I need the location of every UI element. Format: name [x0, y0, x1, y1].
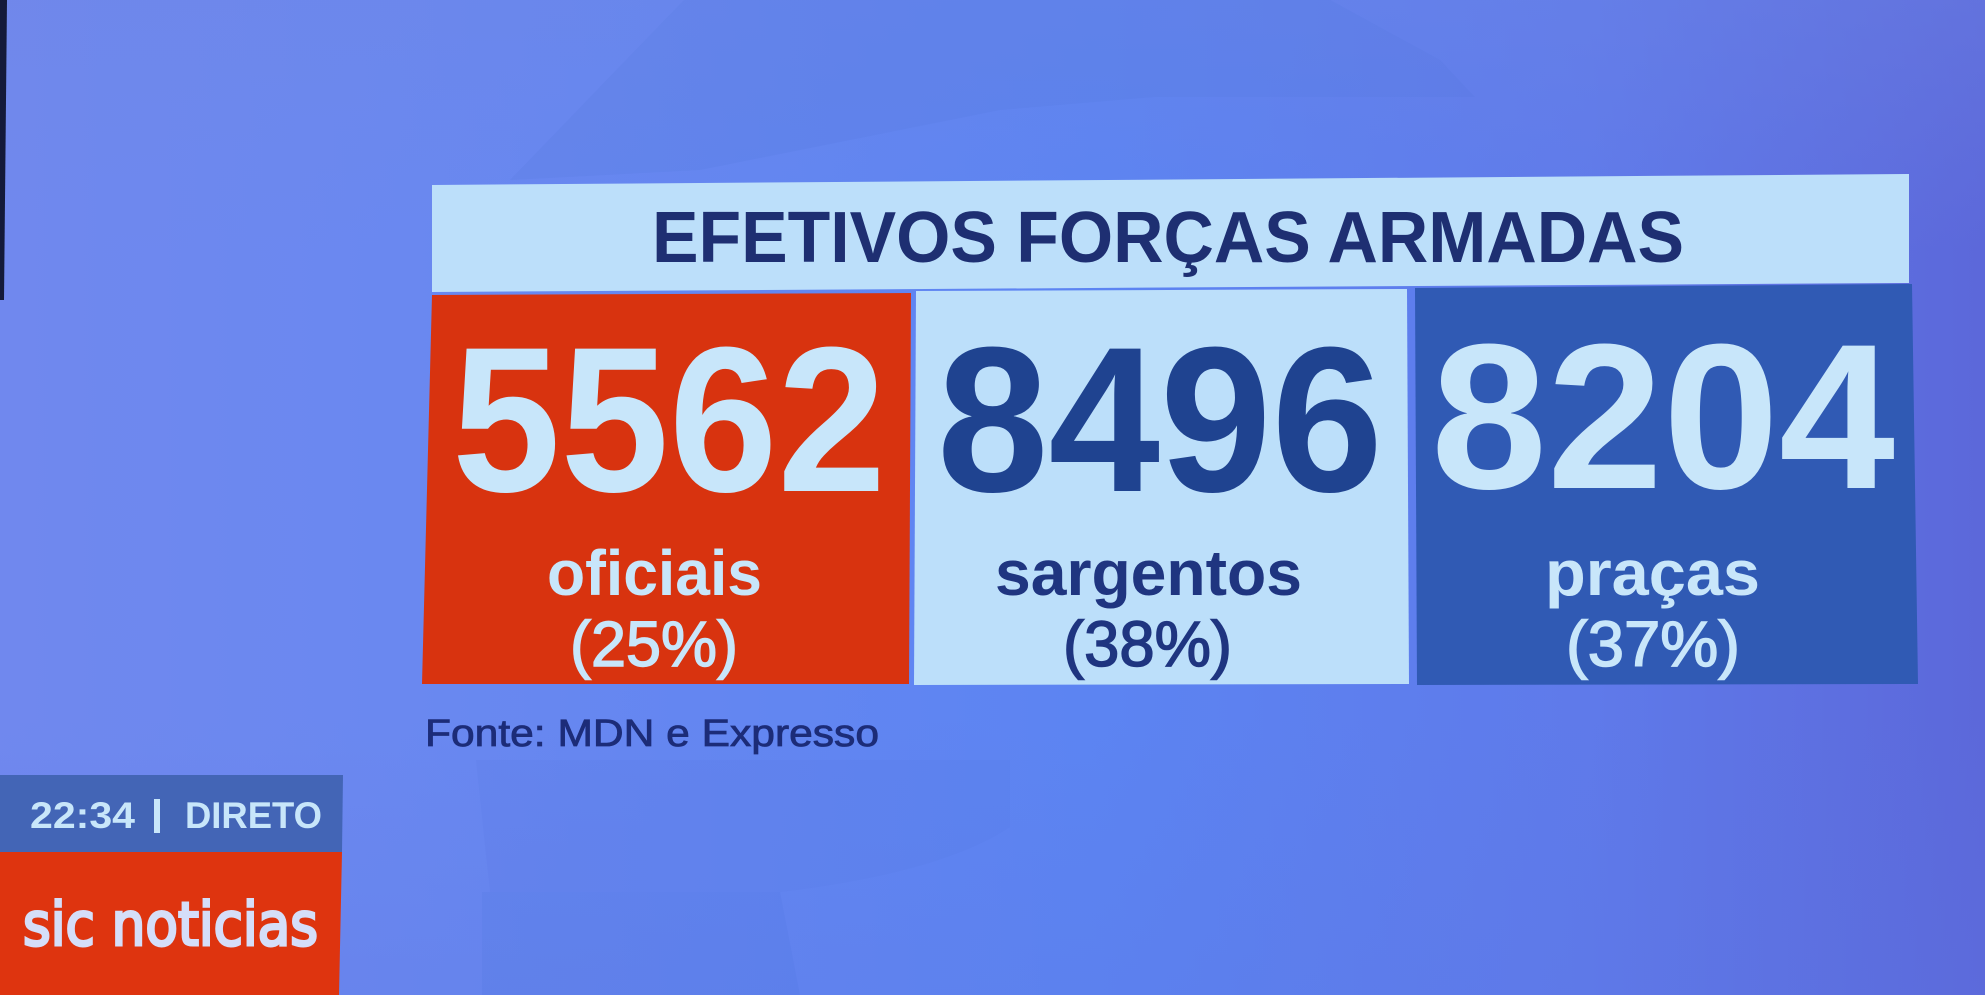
percentage: oficiais: (25%) [570, 608, 738, 680]
channel logo block [0, 852, 342, 995]
source note: Fonte: MDN e Expresso [425, 713, 879, 755]
live label: DIRETO [185, 795, 322, 836]
title text: EFETIVOS FORÇAS ARMADAS [652, 198, 1684, 278]
panel: oficiais [422, 293, 911, 684]
number: praças: 8204 [1431, 301, 1895, 532]
panel: sargentos [914, 289, 1409, 685]
label: oficiais: oficiais [547, 537, 762, 609]
time and live bar [0, 775, 343, 852]
percentage: praças: (37%) [1566, 608, 1740, 680]
title banner [432, 174, 1909, 292]
panel: praças [1415, 284, 1918, 685]
time: 22:34 [30, 795, 135, 836]
label: sargentos: sargentos [995, 537, 1302, 609]
number: oficiais: 5562 [452, 304, 886, 535]
percentage: sargentos: (38%) [1063, 608, 1232, 680]
number: sargentos: 8496 [937, 304, 1383, 535]
channel logo text: sic noticias [23, 890, 318, 960]
separator [154, 799, 160, 833]
label: praças: praças [1545, 537, 1760, 609]
